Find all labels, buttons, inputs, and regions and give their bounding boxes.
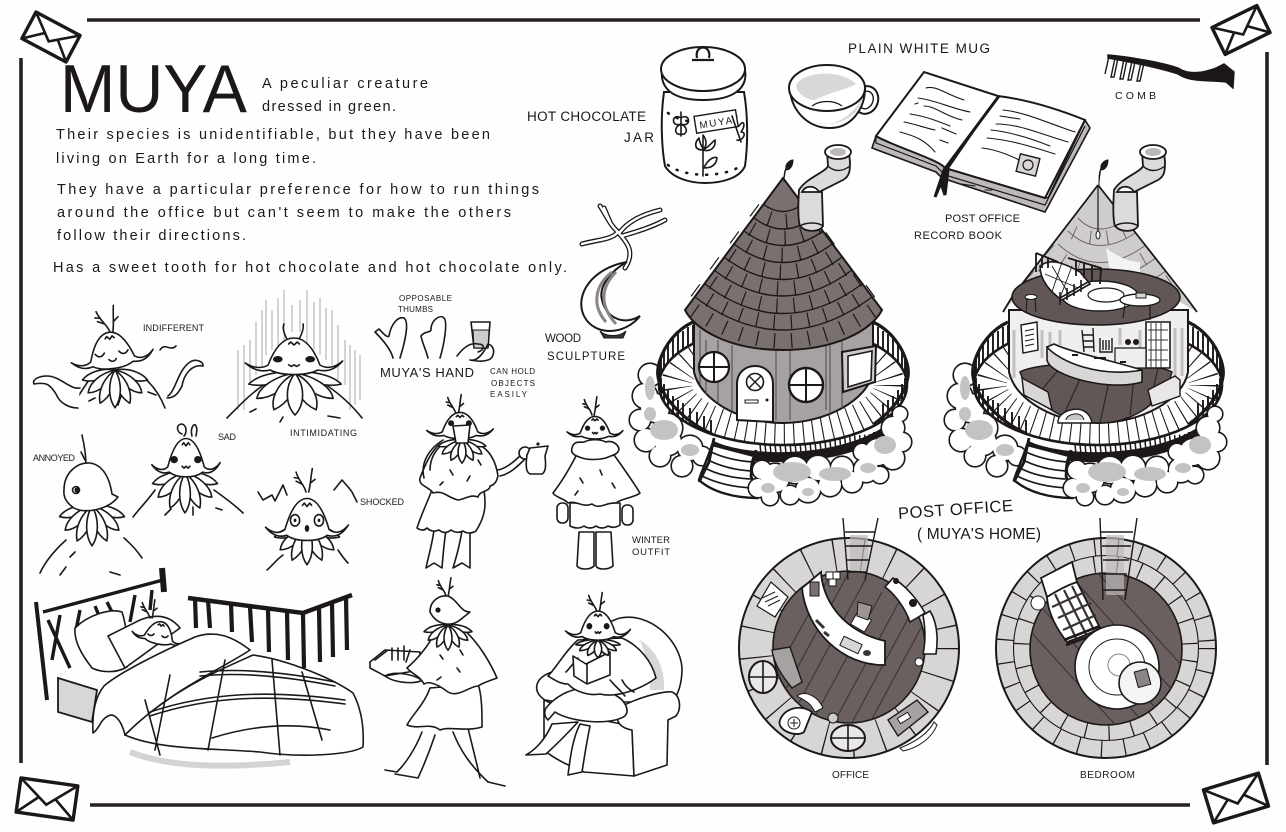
round table: [1119, 662, 1161, 704]
antlers: [446, 394, 464, 414]
front door: [737, 366, 773, 422]
comb: [1105, 55, 1234, 88]
face: [245, 338, 343, 374]
antlers: [583, 397, 599, 415]
antlers: [283, 324, 303, 341]
head profile: [430, 596, 470, 624]
body: [133, 490, 243, 517]
wooden floor: [1029, 572, 1183, 726]
legs: [426, 530, 470, 568]
collar: [151, 469, 219, 513]
mattress side: [58, 678, 97, 722]
hand labels: EASILY: [490, 390, 528, 399]
arm and jug: [423, 440, 548, 478]
blanket fold: [93, 634, 250, 735]
chair arm: [617, 692, 679, 776]
label winter outfit: [632, 535, 670, 558]
envelope top right: [1212, 6, 1270, 54]
bedroom label: BEDROOM: [1080, 770, 1135, 781]
wall poster: [757, 582, 788, 617]
book label: [914, 213, 1020, 242]
shock marks: [258, 480, 357, 502]
collar: [423, 622, 473, 650]
chair: [1100, 338, 1112, 352]
body: [227, 382, 362, 422]
ladder: [843, 518, 878, 580]
bed: [1031, 562, 1101, 645]
label winter outfit: WINTER: [632, 535, 670, 546]
deck and garden: [630, 322, 911, 505]
loft bed: [1025, 253, 1101, 312]
plain white mug: [789, 65, 882, 128]
face: [266, 498, 348, 540]
left arm: [34, 376, 80, 408]
label winter outfit: OUTFIT: [632, 547, 670, 558]
chair side: [537, 670, 578, 705]
stone ring: [996, 538, 1216, 758]
drooping antlers: [178, 424, 197, 436]
muya drinking with jug: [417, 394, 548, 568]
label intimidating: INTIMIDATING: [290, 428, 357, 438]
sculpture label: [545, 333, 625, 363]
head: [567, 416, 623, 439]
roof sprout: [784, 160, 793, 182]
label indifferent: [143, 323, 204, 350]
face: [152, 438, 220, 477]
bedroom floor plan: [996, 518, 1216, 758]
head: [427, 412, 493, 439]
ladder: [1100, 518, 1137, 600]
jar label: JAR: [624, 130, 654, 145]
hand labels: OPPOSABLE: [399, 294, 452, 303]
tray: [370, 646, 422, 683]
balcony rail: [188, 595, 352, 668]
gray shadow rays: [238, 290, 360, 410]
wooden floor: [772, 570, 926, 724]
collar: [58, 502, 126, 546]
hand labels: THUMBS: [398, 305, 433, 314]
antlers: [587, 592, 604, 612]
upper roof interior: [1003, 185, 1197, 312]
body: [40, 538, 142, 575]
intro text: follow their directions.: [57, 228, 246, 244]
body: [72, 375, 165, 408]
book label: POST OFFICE: [945, 213, 1020, 225]
expression: shocked: [258, 469, 357, 570]
label indifferent: INDIFFERENT: [143, 323, 204, 333]
post office heading: POST OFFICE: [898, 497, 1013, 523]
muya in bed: [36, 568, 363, 766]
envelope bottom right: [1203, 773, 1269, 823]
curved counter: [802, 572, 885, 665]
headboard: [36, 568, 164, 700]
intro text: [53, 76, 567, 276]
house exterior: [630, 145, 911, 505]
envelope top left: [22, 12, 80, 62]
intro text: Their species is unidentifiable, but they have been: [56, 127, 490, 143]
chimney: [798, 145, 851, 231]
office poster: [1021, 322, 1038, 353]
muya in winter outfit: [553, 397, 640, 569]
expression: intimidating: [227, 290, 362, 422]
sofa: [772, 647, 802, 688]
reception counter: [1047, 344, 1142, 385]
legs: [526, 722, 590, 775]
title: MUYA: [60, 51, 248, 127]
lower wall: [1009, 310, 1188, 423]
hand labels: [380, 294, 535, 399]
shingled roof: [685, 178, 882, 350]
right arm: [167, 360, 203, 398]
antlers: [94, 305, 120, 334]
intro text: dressed in green.: [262, 99, 396, 115]
lower coat: [417, 490, 485, 533]
boxes behind counter: [826, 572, 840, 586]
boots: [577, 532, 613, 569]
muya reading in armchair: [526, 592, 682, 776]
window south: [831, 725, 865, 751]
chair: [851, 602, 872, 632]
head: [64, 463, 118, 511]
bookshelf: [1115, 322, 1170, 368]
intro text: around the office but can't seem to make the others: [57, 205, 511, 221]
collar: [247, 368, 343, 415]
office floor plan: [739, 518, 959, 758]
chair base: [544, 700, 634, 776]
mitten two: [421, 317, 446, 358]
hand labels: CAN HOLD: [490, 367, 535, 376]
stone ring: [739, 538, 959, 758]
upper coat: [553, 452, 640, 506]
window left: [699, 352, 729, 382]
antlers: [437, 578, 453, 596]
roof sprout: [1099, 160, 1108, 186]
book label: RECORD BOOK: [914, 230, 1003, 242]
post office heading: [898, 497, 1041, 543]
round rug: [1075, 625, 1159, 709]
small round table: [1120, 293, 1160, 320]
pillows: [75, 611, 180, 672]
mittens: [557, 503, 633, 525]
label sad: SAD: [218, 432, 236, 442]
jar label: [527, 109, 654, 145]
lower coat: [407, 684, 482, 730]
hand labels: MUYA'S HAND: [380, 365, 474, 380]
sculpture label: SCULPTURE: [547, 351, 625, 363]
body: [267, 550, 348, 570]
upper coat: [420, 444, 498, 500]
legs: [385, 728, 505, 786]
window west: [749, 661, 777, 693]
front desk: [888, 700, 937, 751]
muya walking with tray: [370, 578, 505, 786]
collar: [575, 638, 621, 658]
sofa, desk and door: [1022, 376, 1180, 423]
head: [566, 611, 630, 640]
face: [68, 327, 155, 374]
label annoyed: ANNOYED: [33, 453, 76, 463]
deck and garden: [945, 322, 1226, 505]
comb label: COMB: [1115, 90, 1156, 102]
muya's hand study: [375, 317, 494, 361]
mitten one: [375, 318, 407, 358]
intro text: living on Earth for a long time.: [56, 151, 316, 167]
arms: [566, 658, 634, 696]
entrance door: [779, 708, 812, 734]
chimney: [1113, 145, 1166, 231]
hot chocolate jar: [661, 47, 747, 183]
envelope bottom left: [16, 778, 78, 820]
office label: OFFICE: [832, 770, 869, 781]
mug label: PLAIN WHITE MUG: [848, 41, 990, 56]
label shocked: SHOCKED: [360, 497, 404, 507]
hot chocolate jar: MUYA: [699, 115, 733, 132]
intro text: They have a particular preference for how to run things: [57, 182, 539, 198]
post office heading: ( MUYA'S HOME): [917, 526, 1041, 543]
intro text: A peculiar creature: [262, 76, 428, 92]
back desk and shelf: [885, 578, 937, 666]
post office record book: [872, 72, 1090, 212]
coat: [548, 638, 656, 695]
hand labels: OBJECTS: [491, 379, 535, 388]
square window: [842, 346, 876, 392]
collar: [81, 366, 149, 408]
head asleep: [131, 600, 188, 650]
house cutaway: [945, 145, 1226, 505]
ladder: [1082, 328, 1094, 352]
intro text: Has a sweet tooth for hot chocolate and hot chocolate only.: [53, 260, 567, 276]
jar label: HOT CHOCOLATE: [527, 109, 646, 124]
collar: [273, 523, 341, 565]
skirt: [545, 688, 627, 722]
sprout: [81, 435, 86, 466]
round door mat: [797, 694, 838, 723]
book: [573, 652, 610, 684]
sculpture label: WOOD: [545, 333, 581, 345]
window right: [789, 368, 823, 402]
antlers: [294, 469, 315, 492]
expression: sad: [133, 424, 243, 517]
lower coat: [570, 503, 620, 528]
collar: [437, 437, 487, 463]
expression: indifferent: [34, 305, 203, 408]
chair back: [570, 617, 682, 702]
quilt: [125, 655, 363, 766]
wood sculpture: [581, 206, 665, 338]
mug at mouth: [453, 425, 470, 443]
house wall: [694, 318, 873, 423]
hand with glass: [457, 322, 494, 361]
scarf: [572, 440, 619, 460]
upper floor and rug: [1012, 269, 1180, 325]
expression: annoyed: [40, 435, 142, 575]
upper coat: [407, 630, 497, 694]
